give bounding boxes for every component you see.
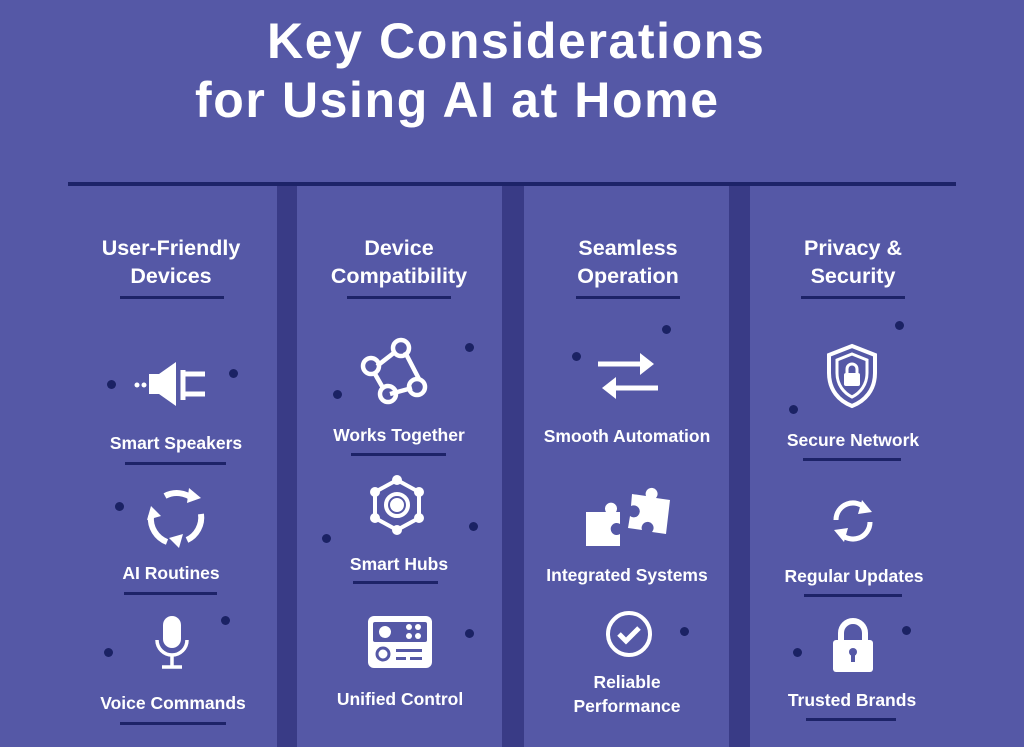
panel: privacy & security (784, 236, 924, 721)
icon: refresh (834, 500, 872, 542)
panel: device compatibility (322, 236, 478, 709)
heading: Operation (577, 264, 679, 288)
icon: puzzle (586, 488, 670, 546)
icon: speaker plug (134, 362, 205, 406)
label: reliable performance: Performance (574, 696, 680, 716)
heading (804, 236, 902, 288)
label: reliable performance: Reliable (593, 672, 661, 692)
title: Key Considerations (267, 13, 765, 69)
heading (577, 236, 679, 288)
panel: seamless operation (544, 236, 710, 716)
icon: checkmark (606, 611, 652, 657)
label: works together: Works Together (333, 425, 465, 445)
heading: Privacy & (804, 236, 902, 260)
icon: shield (827, 344, 877, 408)
icon: swap arrows (598, 353, 658, 399)
heading (102, 236, 240, 288)
heading: User-Friendly (102, 236, 240, 260)
heading: Seamless (578, 236, 678, 260)
label: integrated systems: Integrated Systems (546, 565, 708, 585)
icon: control panel (368, 616, 432, 668)
label: unified control: Unified Control (337, 689, 463, 709)
icon: smart hub (370, 475, 424, 535)
heading: Devices (130, 264, 212, 288)
label: smart speakers: Smart Speakers (110, 433, 242, 453)
title (195, 13, 765, 128)
icon: padlock (833, 618, 873, 672)
heading: Compatibility (331, 264, 467, 288)
label: trusted brands: Trusted Brands (788, 690, 916, 710)
heading (331, 236, 467, 288)
label: smooth automation: Smooth Automation (544, 426, 710, 446)
label: voice commands: Voice Commands (100, 693, 246, 713)
heading: Device (364, 236, 434, 260)
icon: network (360, 338, 428, 404)
label: secure network: Secure Network (787, 430, 919, 450)
title: for Using AI at Home (195, 72, 720, 128)
label: regular updates: Regular Updates (784, 566, 924, 586)
icon: ai routines (147, 488, 204, 548)
panel: user-friendly devices (100, 236, 246, 725)
heading: Security (811, 264, 895, 288)
icon: microphone (155, 616, 189, 669)
label: ai routines: AI Routines (122, 563, 220, 583)
label: reliable performance (574, 672, 680, 716)
label: smart hubs: Smart Hubs (350, 554, 448, 574)
